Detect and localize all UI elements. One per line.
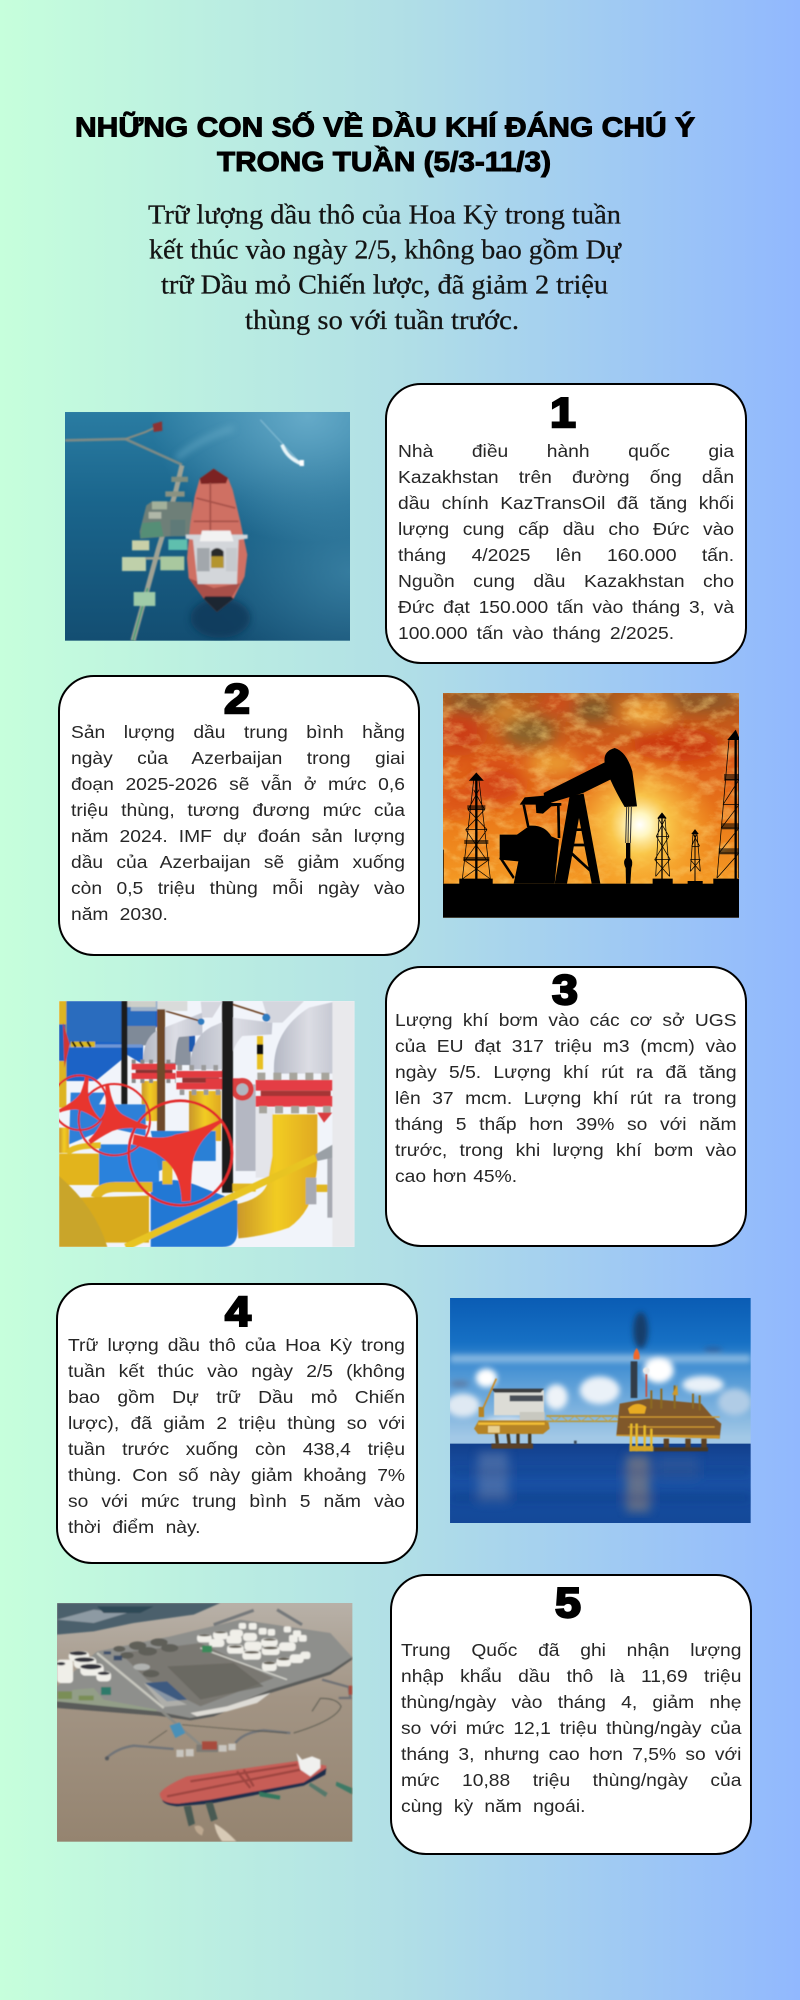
card 1 xyxy=(385,383,747,664)
card 3 text: cao hơn 45%. xyxy=(395,1166,517,1186)
title: TRONG TUẦN (5/3-11/3) xyxy=(217,146,551,177)
card 3 text: lên 37 mcm. Lượng khí rút ra trong xyxy=(395,1088,737,1108)
card 2 text: đoạn 2025-2026 sẽ vẫn ở mức 0,6 xyxy=(71,774,405,794)
card 2 text xyxy=(71,722,611,924)
number 1: 1 xyxy=(550,388,576,436)
card 3 text: trước, trong khi lượng khí bơm vào xyxy=(395,1140,737,1160)
subtitle text block: thùng so với tuần trước. xyxy=(245,305,519,335)
card 3 text: Lượng khí bơm vào các cơ sở UGS xyxy=(395,1010,737,1030)
card 4 text xyxy=(68,1335,405,1537)
card 1 text xyxy=(398,441,734,643)
subtitle text block xyxy=(148,200,622,336)
card 2 text: triệu thùng, tương đương mức của xyxy=(71,800,405,820)
card 2 text: năm 2030. xyxy=(71,904,168,924)
card 2 text: năm 2024. IMF dự đoán sản lượng xyxy=(71,826,405,846)
card 5 text: thùng/ngày vào tháng 4, giảm nhẹ xyxy=(400,1692,741,1712)
card 5 xyxy=(390,1574,752,1854)
card 2 text: Sản lượng dầu trung bình hằng xyxy=(71,722,405,742)
card 3 text xyxy=(395,1010,737,1186)
card 4 xyxy=(56,1282,418,1564)
card 5 text xyxy=(400,1437,742,1816)
number 2: 2 xyxy=(224,675,250,722)
card 4 text: so với mức trung bình 5 năm vào xyxy=(68,1491,405,1511)
photo: port with tank farm and red tanker xyxy=(57,1603,353,1842)
card 4 text: bao gồm Dự trữ Dầu mỏ Chiến xyxy=(68,1387,405,1407)
card 3 xyxy=(385,966,747,1247)
card 5 text: so với mức 12,1 triệu thùng/ngày của xyxy=(400,1718,741,1738)
card 1 text: dầu chính KazTransOil đã tăng khối xyxy=(398,493,734,513)
number 4: 4 xyxy=(225,1288,251,1335)
card 1 text: lượng cung cấp dầu cho Đức vào xyxy=(398,519,734,539)
card 1 text: tháng 4/2025 lên 160.000 tấn. xyxy=(398,545,734,565)
card 2 xyxy=(58,674,420,956)
card 4 text: Trữ lượng dầu thô của Hoa Kỳ trong xyxy=(68,1335,405,1355)
card 3 text: của EU đạt 317 triệu m3 (mcm) vào xyxy=(395,1036,737,1056)
card 5 text: cùng kỳ năm ngoái. xyxy=(400,1796,585,1816)
card 5 text: Trung Quốc đã ghi nhận lượng xyxy=(400,1640,741,1660)
photo: tanker at offshore jetty xyxy=(65,412,747,872)
number 5: 5 xyxy=(555,1578,581,1626)
card 4 text: tuần trước xuống còn 438,4 triệu xyxy=(68,1439,405,1459)
subtitle text block: kết thúc vào ngày 2/5, không bao gồm Dự xyxy=(149,235,622,265)
card 3 text: ngày 5/5. Lượng khí rút ra đã tăng xyxy=(395,1062,737,1082)
number 3: 3 xyxy=(552,966,578,1013)
card 4 text: thùng. Con số này giảm khoảng 7% xyxy=(68,1465,405,1485)
card 2 text: còn 0,5 triệu thùng mỗi ngày vào xyxy=(71,878,405,898)
card 1 text: 100.000 tấn vào tháng 2/2025. xyxy=(398,623,674,643)
subtitle text block: trữ Dầu mỏ Chiến lược, đã giảm 2 triệu xyxy=(161,270,609,300)
card 4 text: thời điểm này. xyxy=(68,1517,201,1537)
title xyxy=(75,110,696,178)
card 5 text: mức 10,88 triệu thùng/ngày của xyxy=(400,1770,741,1790)
subtitle text block: Trữ lượng dầu thô của Hoa Kỳ trong tuần xyxy=(148,200,622,230)
title: NHỮNG CON SỐ VỀ DẦU KHÍ ĐÁNG CHÚ Ý xyxy=(75,110,695,142)
photo: offshore oil platforms xyxy=(450,1298,751,1523)
card 5 text: nhập khẩu dầu thô là 11,69 triệu xyxy=(400,1666,741,1686)
photo: pumpjack at sunset xyxy=(443,693,739,918)
card 3 text: tháng 5 thấp hơn 39% so với năm xyxy=(395,1114,737,1134)
photo: gas valves and pipes in snow xyxy=(59,1001,355,1247)
card 1 text: Nhà điều hành quốc gia xyxy=(398,441,734,461)
card 1 text: Nguồn cung dầu Kazakhstan cho xyxy=(398,571,734,591)
card 1 text: Đức đạt 150.000 tấn vào tháng 3, và xyxy=(398,597,734,617)
card 2 text: dầu của Azerbaijan sẽ giảm xuống xyxy=(71,852,405,872)
card 2 text: ngày của Azerbaijan trong giai xyxy=(71,748,405,768)
card 4 text: tuần kết thúc vào ngày 2/5 (không xyxy=(68,1361,405,1381)
card 5 text: tháng 3, nhưng cao hơn 7,5% so với xyxy=(400,1744,741,1764)
card 4 text: lược), đã giảm 2 triệu thùng so với xyxy=(68,1413,405,1433)
card 1 text: Kazakhstan trên đường ống dẫn xyxy=(398,467,734,487)
